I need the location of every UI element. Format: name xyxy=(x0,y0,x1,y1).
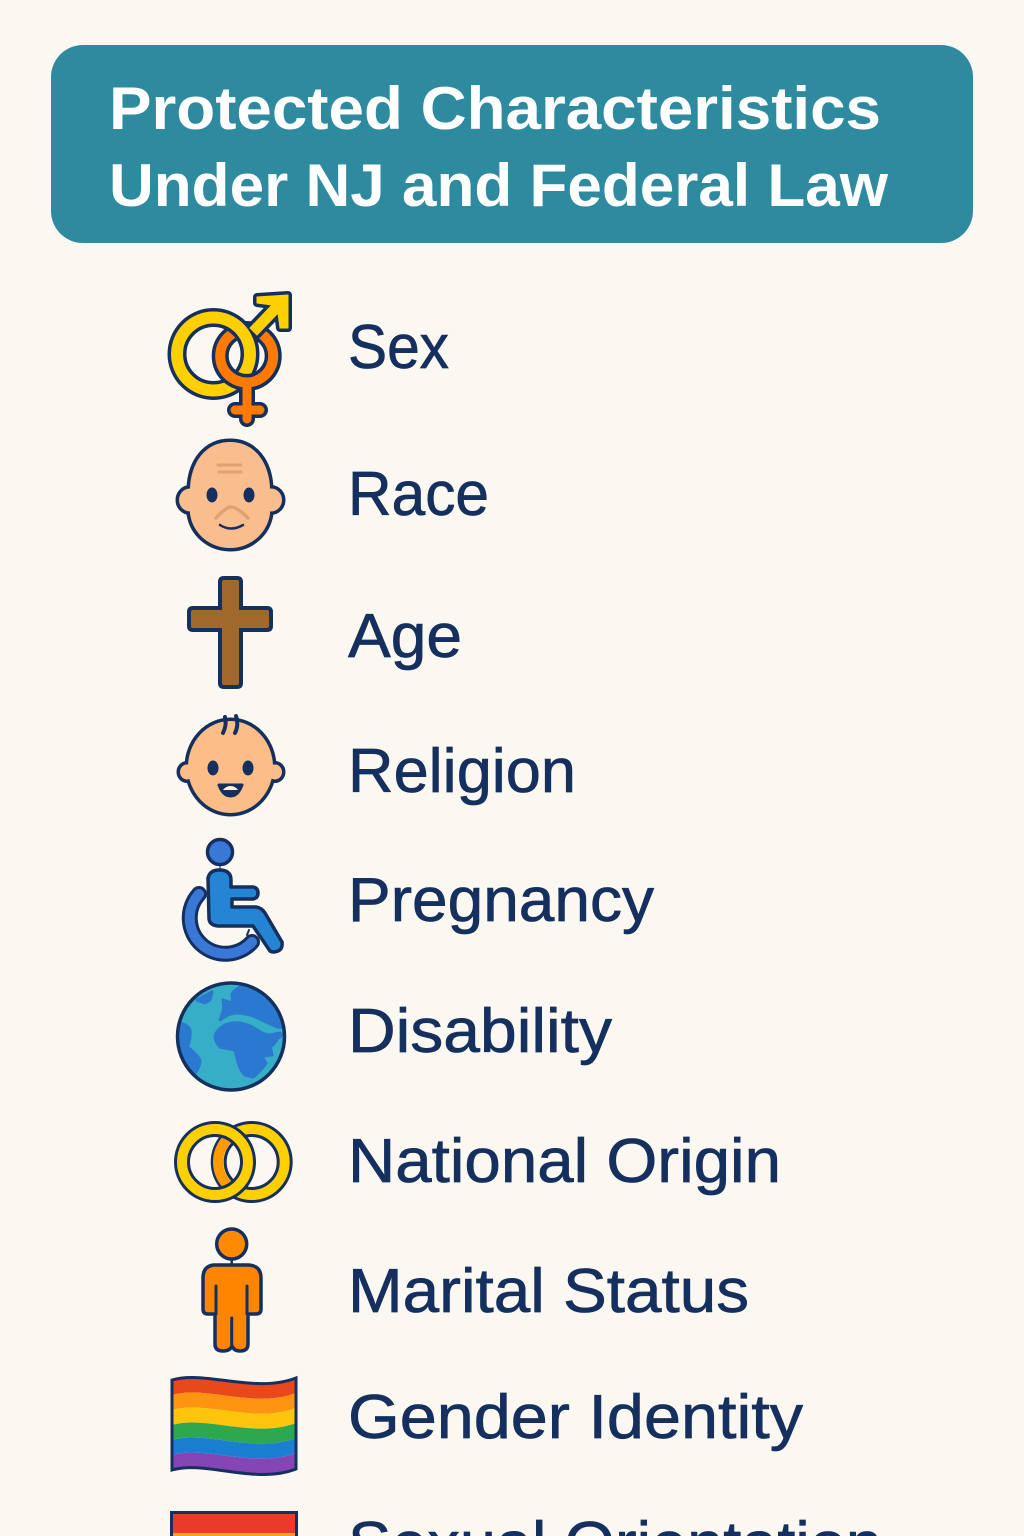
row: National Origin xyxy=(182,1127,781,1196)
title text xyxy=(109,75,888,219)
label: Pregnancy: Pregnancy xyxy=(348,866,654,935)
row: Sexual Orientation xyxy=(172,1510,882,1536)
row: Gender Identity xyxy=(172,1377,803,1475)
label: Sex: Sex xyxy=(348,313,449,382)
row: Sex xyxy=(177,295,449,419)
icon: wedding rings xyxy=(182,1129,285,1195)
row: Disability xyxy=(170,983,612,1090)
label: National Origin: National Origin xyxy=(348,1127,781,1196)
icon: globe xyxy=(170,983,292,1090)
icon: intertwined gender symbols xyxy=(177,295,288,419)
icon: rainbow flag xyxy=(172,1377,296,1475)
title text: Under NJ and Federal Law xyxy=(109,152,888,219)
row: Religion xyxy=(180,716,576,813)
row: Pregnancy xyxy=(190,840,654,954)
label: Religion: Religion xyxy=(348,737,576,806)
title banner xyxy=(51,45,973,243)
label: Race: Race xyxy=(348,460,489,529)
label: Age: Age xyxy=(348,602,462,671)
row: Race xyxy=(179,442,489,548)
row: Marital Status xyxy=(203,1229,749,1351)
icon: elderly face xyxy=(179,442,282,548)
icon: second rainbow flag xyxy=(172,1512,296,1536)
row: Age xyxy=(189,578,462,687)
icon: wheelchair user xyxy=(190,840,282,954)
label: Marital Status: Marital Status xyxy=(348,1257,749,1326)
icon: person xyxy=(203,1229,261,1351)
label: Disability: Disability xyxy=(348,997,612,1066)
icon: baby face xyxy=(180,716,282,813)
icon: cross xyxy=(189,578,271,687)
label: Gender Identity: Gender Identity xyxy=(348,1383,803,1452)
title text: Protected Characteristics xyxy=(109,75,881,142)
